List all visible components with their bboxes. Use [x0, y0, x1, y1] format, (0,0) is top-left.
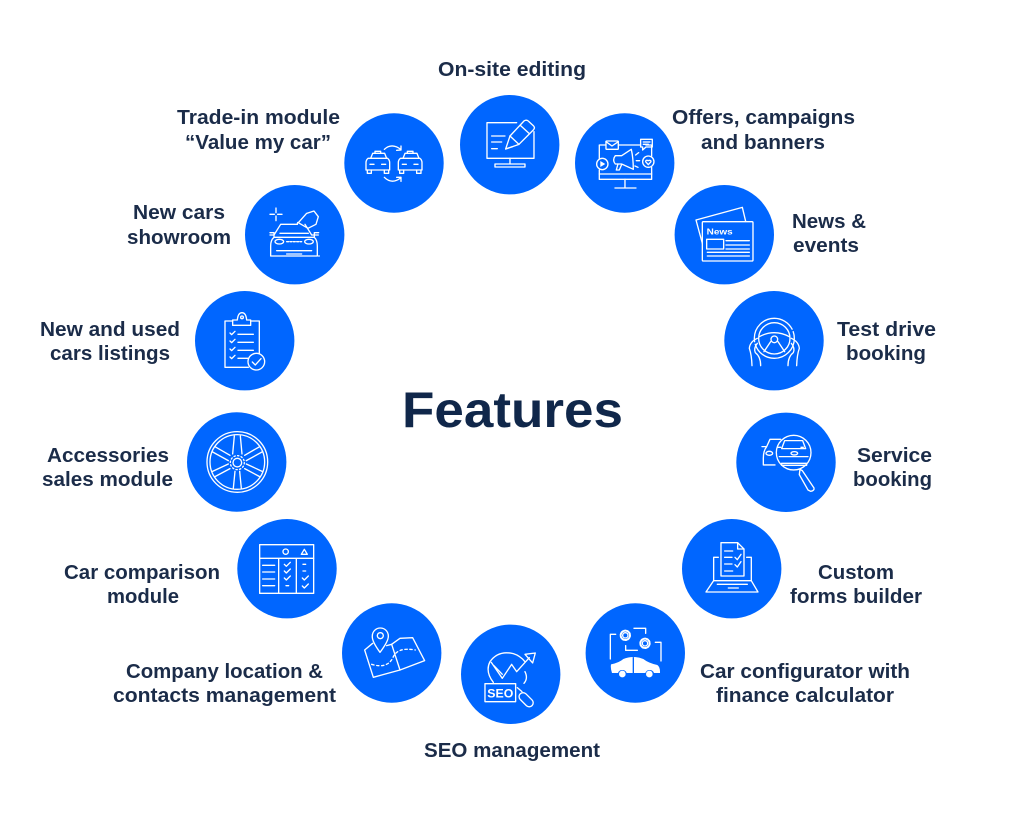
circle [586, 603, 685, 703]
label [700, 661, 910, 707]
label [672, 107, 855, 154]
label: booking [853, 469, 932, 491]
icon: alloy wheel [207, 432, 268, 492]
circle [344, 113, 444, 213]
label: SEO management [424, 740, 600, 762]
label: module [107, 586, 179, 608]
circle [187, 412, 286, 512]
icon: shiny car with tag [270, 208, 320, 257]
label: New and used [40, 319, 180, 341]
icon: SEO magnifier with chart: SEO [487, 687, 513, 701]
label [853, 445, 932, 491]
label: Test drive [837, 319, 936, 341]
circle [460, 95, 559, 194]
icon: car with gears [610, 628, 661, 677]
icon: monitor with megaphone [597, 139, 654, 188]
label: cars listings [50, 343, 170, 365]
circle [575, 113, 674, 213]
icon: SEO magnifier with chart [485, 653, 535, 708]
icon: cars under magnifier [762, 435, 814, 491]
label [127, 202, 231, 249]
circle [724, 291, 824, 390]
label [790, 562, 922, 608]
label: Accessories [47, 445, 169, 467]
circle [682, 519, 781, 618]
feature: new cars showroom [127, 185, 344, 284]
icon: steering wheel with hands [749, 318, 799, 366]
label: and banners [701, 132, 825, 154]
label: events [793, 235, 859, 257]
feature: accessories sales module [42, 412, 286, 512]
label [792, 211, 866, 257]
label: sales module [42, 469, 173, 491]
label: New cars [133, 202, 225, 224]
label: Car configurator with [700, 661, 910, 683]
label: forms builder [790, 586, 922, 608]
feature: new and used cars listings [40, 291, 294, 390]
label: Offers, campaigns [672, 107, 855, 129]
label [837, 319, 936, 365]
label: contacts management [113, 685, 336, 707]
label: Custom [818, 562, 894, 584]
title: Features [402, 382, 623, 438]
label: News & [792, 211, 866, 233]
feature: company location and contacts management [113, 603, 441, 707]
feature: car comparison module [64, 519, 337, 618]
label: On-site editing [438, 59, 586, 81]
icon: laptop with form [706, 543, 758, 592]
feature: offers, campaigns and banners [575, 107, 855, 213]
label: Car comparison [64, 562, 220, 584]
circle [342, 603, 441, 703]
label: “Value my car” [185, 132, 331, 154]
feature: car configurator with finance calculator [586, 603, 910, 707]
icon: newspaper: News [707, 226, 733, 236]
label [42, 445, 173, 491]
icon: monitor with pencil [487, 120, 534, 167]
circle [461, 625, 560, 724]
label [177, 107, 340, 154]
label [113, 661, 336, 707]
label: Company location & [126, 661, 323, 683]
label: finance calculator [716, 685, 894, 707]
label: showroom [127, 227, 231, 249]
icon: swapping cars [366, 146, 422, 181]
label: Trade-in module [177, 107, 340, 129]
circle [736, 413, 836, 512]
icon: map with pin [365, 628, 425, 677]
circle [245, 185, 344, 284]
feature: custom forms builder [682, 519, 922, 618]
circle [237, 519, 337, 618]
label: booking [846, 343, 926, 365]
feature: on-site editing [438, 59, 586, 194]
label [40, 319, 180, 365]
icon: newspaper [696, 207, 753, 261]
icon: comparison table [260, 545, 314, 593]
label: Service [857, 445, 932, 467]
label [64, 562, 220, 608]
feature: news and events [675, 185, 866, 284]
icon: clipboard checklist [225, 313, 265, 370]
circle [195, 291, 294, 390]
feature: SEO management [424, 625, 600, 762]
feature: test drive booking [724, 291, 936, 390]
feature: trade-in module [177, 107, 444, 213]
feature: service booking [736, 413, 932, 512]
circle [675, 185, 774, 284]
